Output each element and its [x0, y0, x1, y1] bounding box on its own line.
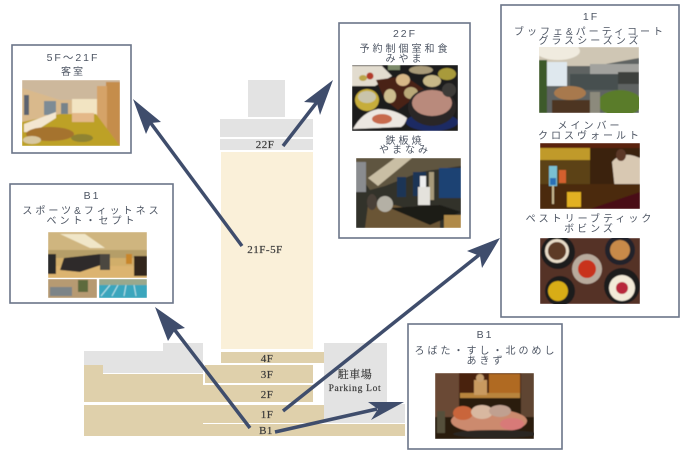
building cross-section [84, 80, 405, 436]
heading: B1: B1 [477, 329, 493, 341]
arrow: B1 to sports and fitness [155, 307, 250, 428]
parking lot label: Parking Lot [329, 384, 381, 394]
label: Vent Sept: ベント・セプト [46, 215, 138, 227]
photo: Japanese course meal [352, 65, 458, 131]
label: main bar: メインバー [558, 120, 622, 132]
panel: 5F-21F guest rooms [12, 45, 131, 153]
arrow: 1F to restaurants [283, 238, 500, 411]
floor labels: 1F [261, 409, 273, 421]
label: Yamanami: やまなみ [379, 144, 431, 156]
label: Miyama: みやま [386, 53, 424, 65]
photo: teppanyaki counter [356, 158, 461, 228]
label: guest rooms: 客室 [61, 65, 85, 78]
photo: main bar cocktails [540, 143, 640, 209]
heading: 22F: 22F [393, 28, 417, 40]
arrow: 21F-5F to guest rooms [133, 99, 242, 246]
label: robata sushi northern cuisine: ろばた・すし・北のめし [414, 345, 558, 357]
label: Akizu: あきず [466, 355, 506, 367]
label: Cross Vault: クロスヴォールト [538, 129, 642, 142]
panel: B1 sports and fitness [10, 184, 173, 303]
label: pastry boutique: ペストリーブティック [526, 212, 654, 225]
parking lot label: 駐車場 [337, 367, 372, 381]
label: Bobbins: ボビンズ [564, 222, 616, 235]
label: Glass Seasons: グラスシーズンズ [538, 34, 642, 47]
floor labels: 2F [261, 389, 273, 401]
heading: B1: B1 [84, 190, 100, 202]
floor labels: 4F [261, 353, 273, 365]
photo: buffet court [539, 47, 639, 113]
floor labels: 3F [261, 369, 273, 381]
arrow: 22F to restaurants [283, 80, 333, 146]
photo: fitness gym and pool [48, 232, 147, 298]
panel: 1F restaurants and bar [501, 5, 679, 317]
photo: guest room [22, 80, 120, 146]
arrow: B1 to Akizu [275, 402, 404, 432]
floor labels: 21F-5F [247, 244, 283, 256]
label: sports and fitness: スポーツ&フィットネス [22, 205, 162, 217]
photo: seafood platter [435, 373, 537, 439]
label: reserved private room Japanese: 予約制個室和食 [360, 42, 450, 55]
heading: guest rooms: 5F〜21F [47, 52, 99, 64]
floor labels [247, 139, 283, 437]
label: teppanyaki: 鉄板焼 [386, 134, 424, 147]
panel: 22F restaurants [339, 23, 470, 238]
label: buffet and party court: ブッフェ&パーティコート [514, 25, 666, 38]
parking lot label [329, 367, 381, 394]
photo: pastry desserts [540, 235, 640, 306]
panel: B1 robata, sushi, Hokkaido cuisine [408, 324, 562, 449]
heading: 1F: 1F [583, 11, 599, 23]
floor labels: 22F [256, 139, 274, 151]
floor labels: B1 [259, 425, 273, 437]
